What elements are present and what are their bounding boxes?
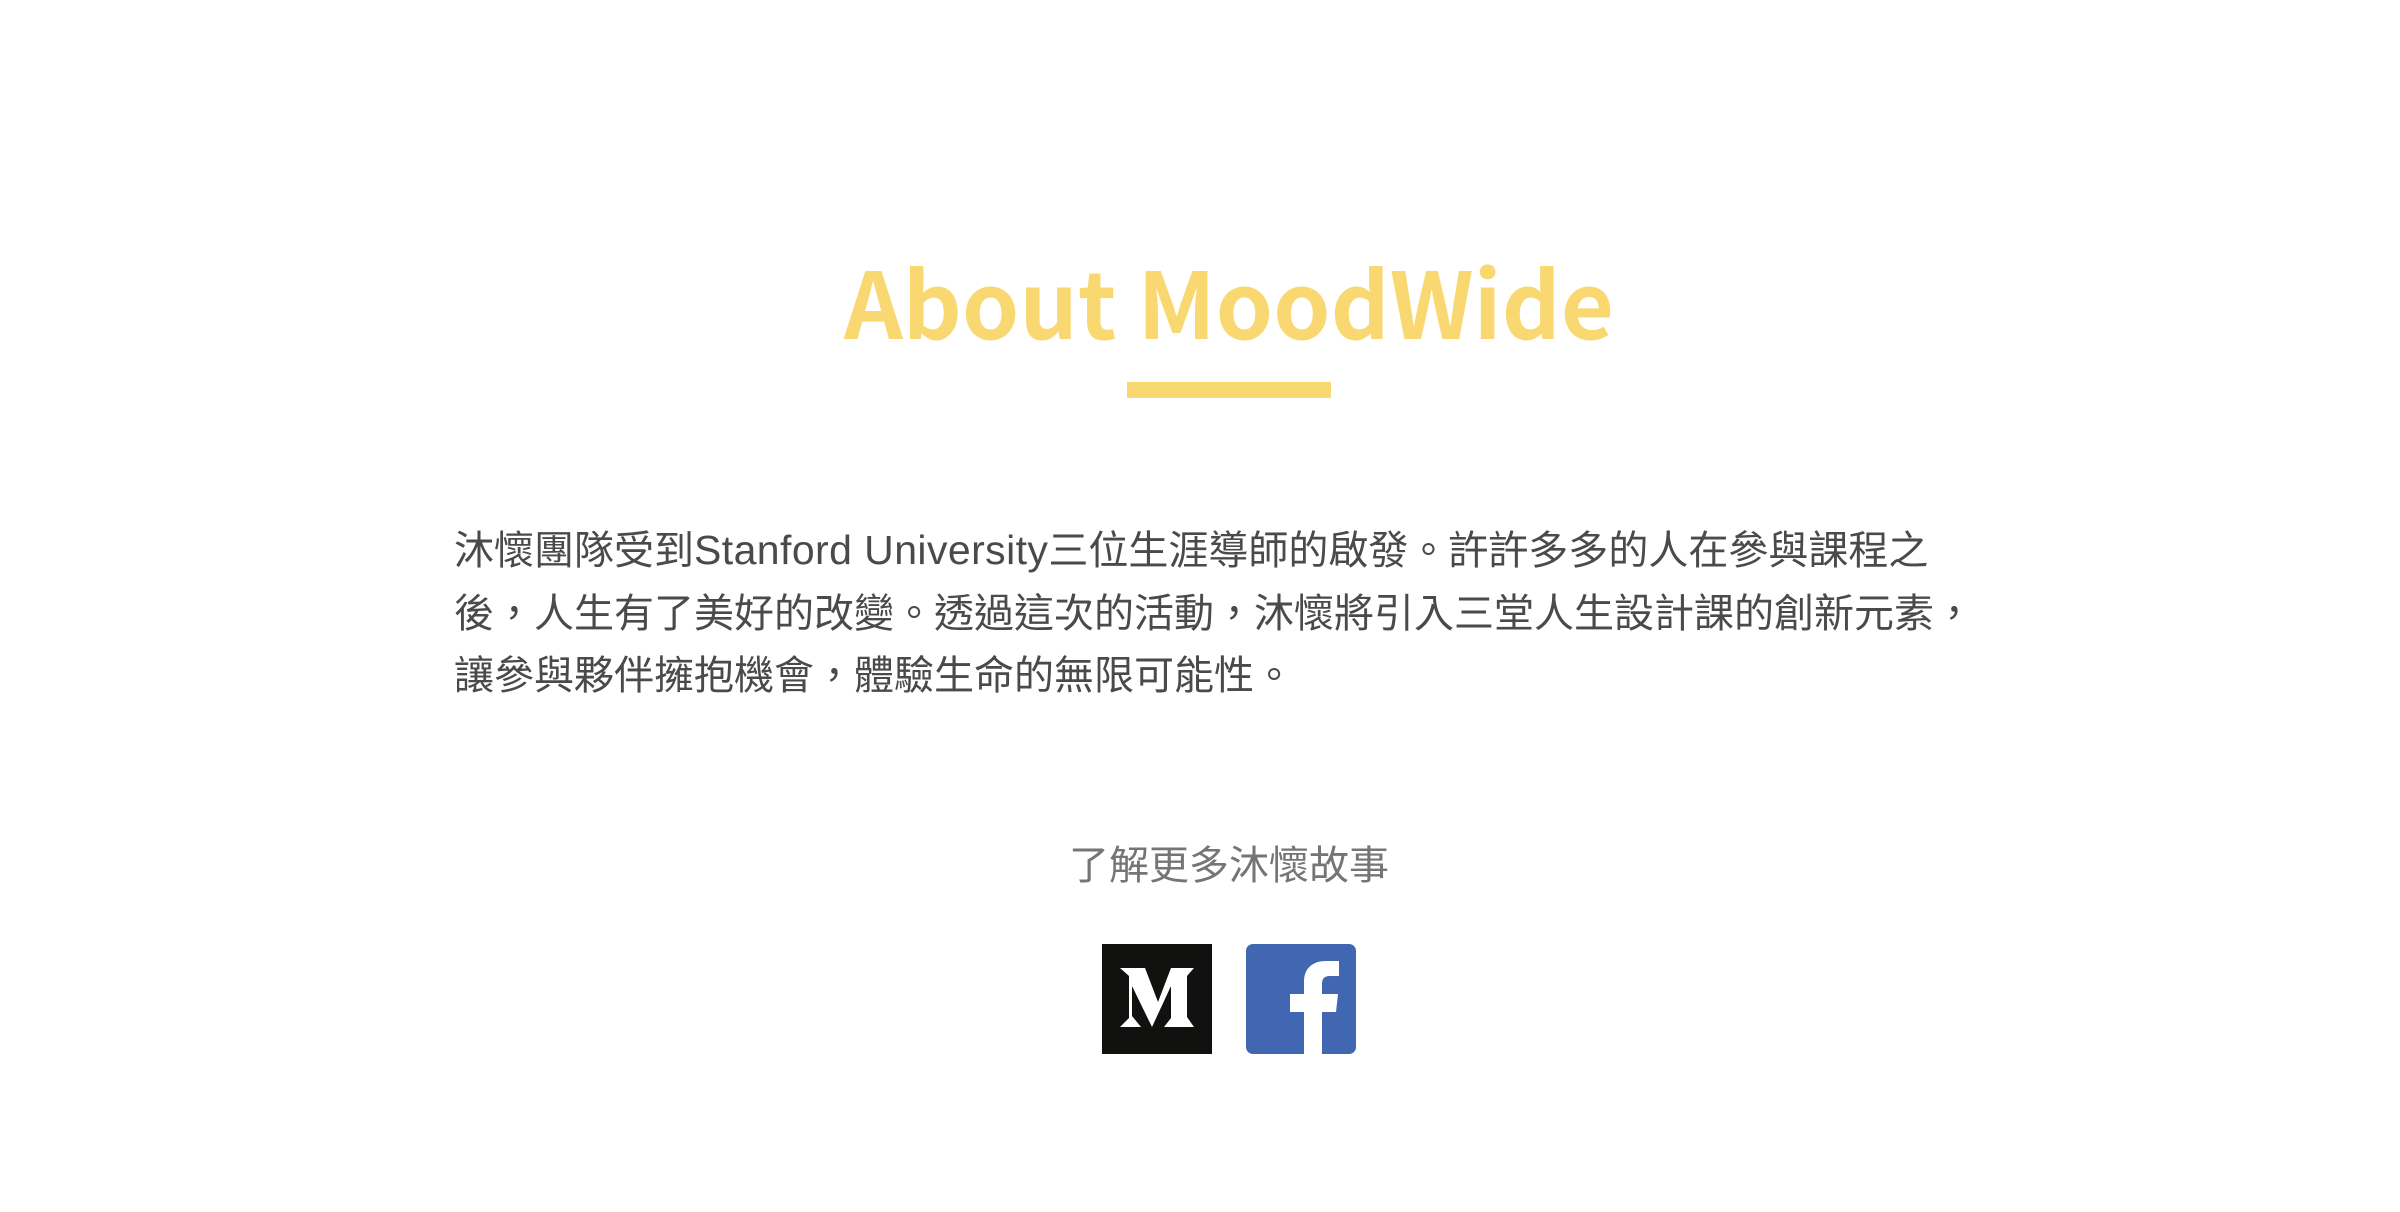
title: About MoodWide	[844, 234, 1614, 366]
title underline	[1127, 382, 1331, 398]
icon: Facebook	[1246, 944, 1356, 1054]
text block: about paragraph: 沐懷團隊受到Stanford University三位生涯導師的啟發。許許多多的人在參與課程之	[454, 527, 1928, 573]
icon: Medium	[1102, 944, 1212, 1054]
text block: about paragraph	[454, 527, 1974, 698]
text block: about paragraph: 後，人生有了美好的改變。透過這次的活動，沐懷將引入三堂人生設計課的創新元素，	[454, 592, 1974, 636]
text block: about paragraph: 讓參與夥伴擁抱機會，體驗生命的無限可能性。	[454, 654, 1294, 698]
call to action text: 了解更多沐懷故事	[1069, 844, 1389, 888]
